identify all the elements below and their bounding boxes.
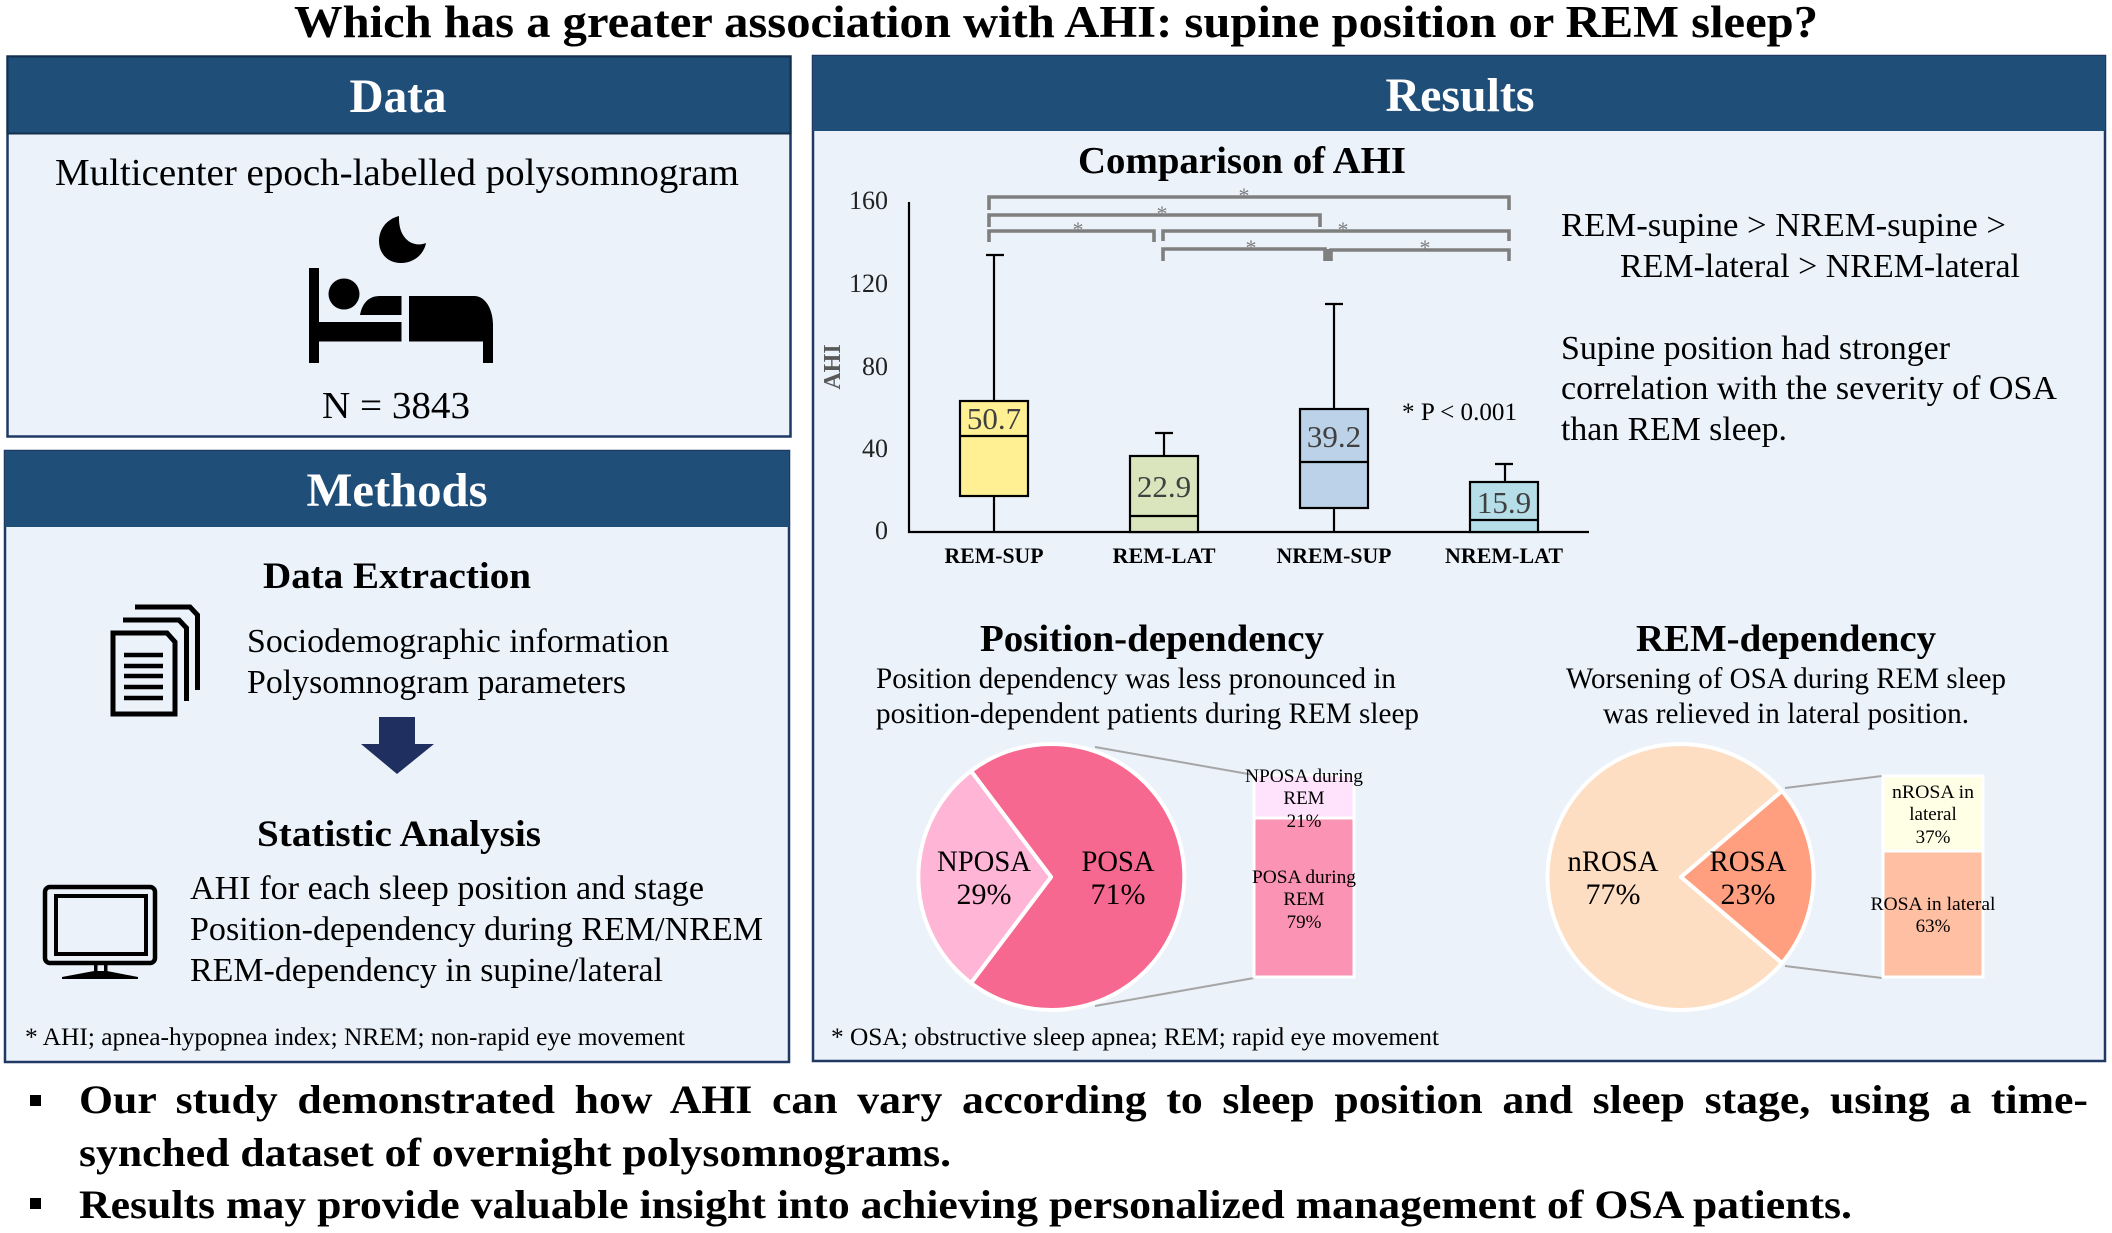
subheading: position-dependency: Position-dependency bbox=[980, 618, 1324, 660]
footnote: OSA and REM: * OSA; obstructive sleep apnea; REM; rapid eye movement bbox=[831, 1024, 1439, 1051]
subheading: data extraction: Data Extraction bbox=[263, 556, 531, 597]
description: REM dependency bbox=[1566, 662, 2006, 730]
heading: data: Data bbox=[350, 70, 446, 123]
text block: AHI ordering bbox=[1561, 207, 2020, 285]
pie chart: ROSA vs nROSA bbox=[1548, 744, 1814, 1010]
stacked bar: lateral breakdown: ROSA in lateral bbox=[1870, 894, 1996, 915]
data source text: Multicenter epoch-labelled polysomnogram bbox=[55, 152, 739, 194]
description: REM dependency: Worsening of OSA during REM sleep bbox=[1566, 662, 2006, 695]
box: NREM-LAT bbox=[1470, 464, 1538, 532]
description: position dependency: position-dependent patients during REM sleep bbox=[876, 697, 1419, 730]
x axis category labels: NREM-SUP bbox=[1276, 543, 1392, 568]
x axis category labels bbox=[944, 543, 1563, 568]
significance brackets: * bbox=[1420, 235, 1430, 260]
y axis ticks bbox=[849, 186, 888, 545]
pie chart: POSA vs NPOSA: POSA bbox=[1082, 845, 1155, 878]
y axis label: AHI bbox=[820, 344, 846, 390]
box: NREM-SUP: 39.2 bbox=[1307, 419, 1361, 454]
section: REM-dependency bbox=[1548, 618, 2006, 1010]
text block: supine correlation: Supine position had stronger bbox=[1561, 330, 1951, 367]
stacked bar: REM breakdown: NPOSA during bbox=[1245, 766, 1364, 787]
box: NREM-SUP bbox=[1300, 304, 1368, 532]
icon: stacked documents bbox=[113, 607, 198, 714]
pie chart: POSA vs NPOSA: 71% bbox=[1090, 878, 1146, 911]
data extraction list: Sociodemographic information bbox=[247, 623, 669, 660]
data extraction list bbox=[247, 623, 669, 701]
panel: results bbox=[813, 56, 2105, 1061]
statistic analysis list: REM-dependency in supine/lateral bbox=[190, 952, 663, 989]
bullet: study demonstration: synched dataset of overnight polysomnograms. bbox=[79, 1130, 951, 1175]
stacked bar: lateral breakdown: 37% bbox=[1916, 827, 1951, 848]
significance brackets: * bbox=[1156, 201, 1168, 226]
description: position dependency bbox=[876, 662, 1419, 730]
pie chart: POSA vs NPOSA: 29% bbox=[956, 878, 1012, 911]
statistic analysis list bbox=[190, 870, 763, 989]
y axis ticks: 80 bbox=[862, 352, 888, 381]
subheading: statistic analysis: Statistic Analysis bbox=[257, 814, 541, 855]
axes bbox=[909, 202, 1589, 532]
pie chart: POSA vs NPOSA: NPOSA bbox=[937, 845, 1031, 878]
connector lines bbox=[1785, 776, 1882, 978]
stacked bar: lateral breakdown bbox=[1870, 776, 1996, 977]
pie chart: ROSA vs nROSA: ROSA bbox=[1710, 845, 1787, 878]
y axis ticks: 160 bbox=[849, 186, 888, 215]
bullet: study demonstration: Our study demonstrated how AHI can vary according to sleep position and sleep stage, using a time- bbox=[79, 1077, 2088, 1122]
subheading: comparison of AHI: Comparison of AHI bbox=[1078, 140, 1406, 182]
stacked bar: REM breakdown: POSA during bbox=[1252, 867, 1357, 888]
stacked bar: lateral breakdown: nROSA in bbox=[1892, 782, 1975, 803]
stacked bar: REM breakdown: 21% bbox=[1287, 811, 1322, 832]
description: position dependency: Position dependency was less pronounced in bbox=[876, 662, 1396, 695]
data extraction list: Polysomnogram parameters bbox=[247, 664, 626, 701]
icon: computer monitor bbox=[45, 887, 155, 979]
statistic analysis list: AHI for each sleep position and stage bbox=[190, 870, 704, 907]
y axis ticks: 0 bbox=[875, 516, 888, 545]
arrow: down bbox=[361, 717, 434, 774]
x axis category labels: REM-LAT bbox=[1112, 543, 1216, 568]
box: REM-LAT: 22.9 bbox=[1137, 469, 1191, 504]
panel: methods bbox=[5, 451, 789, 1062]
y axis ticks: 120 bbox=[849, 269, 888, 298]
significance brackets bbox=[989, 183, 1509, 261]
bullet: study demonstration bbox=[30, 1077, 2088, 1175]
stacked bar: REM breakdown bbox=[1245, 766, 1364, 977]
box: REM-SUP: 50.7 bbox=[967, 401, 1021, 436]
footnote: abbreviations: * AHI; apnea-hypopnea index; NREM; non-rapid eye movement bbox=[25, 1024, 685, 1051]
significance brackets: * bbox=[1238, 183, 1250, 208]
stacked bar: lateral breakdown: 63% bbox=[1916, 916, 1951, 937]
subheading: REM-dependency: REM-dependency bbox=[1636, 618, 1936, 660]
x axis category labels: NREM-LAT bbox=[1445, 543, 1563, 568]
text block: supine correlation bbox=[1561, 330, 2057, 448]
pie chart: POSA vs NPOSA bbox=[918, 744, 1184, 1010]
heading: methods: Methods bbox=[306, 464, 488, 517]
box: NREM-LAT: 15.9 bbox=[1477, 485, 1531, 520]
significance brackets: * bbox=[1338, 217, 1348, 242]
y axis ticks: 40 bbox=[862, 434, 888, 463]
stacked bar: REM breakdown: REM bbox=[1283, 788, 1325, 809]
significance brackets: * bbox=[1072, 217, 1084, 242]
box: REM-LAT bbox=[1130, 433, 1198, 532]
icon: sleeping person in bed under moon bbox=[309, 216, 493, 363]
bullet: personalized management: Results may provide valuable insight into achieving personalized management of OSA patients. bbox=[79, 1182, 1852, 1227]
text block: AHI ordering: REM-supine > NREM-supine > bbox=[1561, 207, 2006, 244]
box: REM-SUP bbox=[960, 255, 1028, 532]
text block: supine correlation: than REM sleep. bbox=[1561, 411, 1787, 448]
sample size: N = 3843 bbox=[322, 385, 470, 427]
connector lines bbox=[1095, 747, 1254, 1006]
pie chart: ROSA vs nROSA: 23% bbox=[1720, 878, 1776, 911]
stacked bar: lateral breakdown: lateral bbox=[1909, 804, 1957, 825]
panel: data bbox=[8, 56, 790, 436]
pie chart: ROSA vs nROSA: 77% bbox=[1586, 878, 1640, 911]
x axis category labels: REM-SUP bbox=[944, 543, 1044, 568]
heading: results: Results bbox=[1386, 69, 1534, 122]
section: position-dependency bbox=[876, 618, 1419, 1010]
box plot: AHI by position and stage bbox=[820, 183, 1589, 568]
text block: supine correlation: correlation with the severity of OSA bbox=[1561, 370, 2057, 407]
stacked bar: REM breakdown: REM bbox=[1283, 889, 1325, 910]
text block: AHI ordering: REM-lateral > NREM-lateral bbox=[1620, 248, 2020, 285]
p value note: * P < 0.001 bbox=[1402, 399, 1517, 426]
statistic analysis list: Position-dependency during REM/NREM bbox=[190, 911, 763, 948]
conclusion bullets bbox=[30, 1077, 2088, 1227]
stacked bar: REM breakdown: 79% bbox=[1287, 912, 1322, 933]
significance brackets: * bbox=[1246, 235, 1256, 260]
description: REM dependency: was relieved in lateral position. bbox=[1603, 697, 1969, 730]
pie chart: ROSA vs nROSA: nROSA bbox=[1568, 845, 1659, 878]
